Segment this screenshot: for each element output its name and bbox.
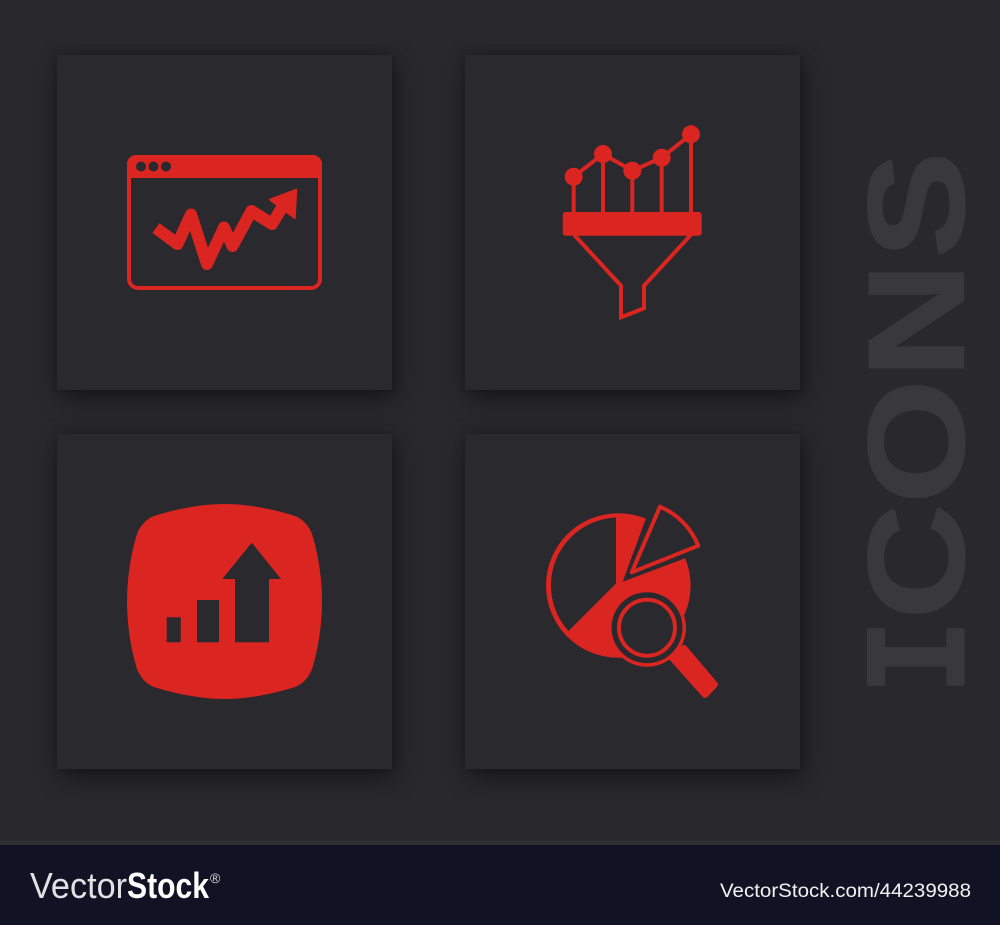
vertical watermark text: ICONS: C bbox=[839, 504, 993, 619]
vertical watermark text: ICONS: O bbox=[839, 379, 993, 504]
icon: funnel with line chart bbox=[563, 125, 702, 317]
icon: rising bars and arrow in squircle bbox=[127, 504, 322, 699]
footer logo: VectorStock: Vector bbox=[30, 865, 127, 906]
panel: bottom-left bbox=[57, 434, 392, 769]
footer logo: VectorStock: Stock bbox=[127, 865, 210, 906]
footer image id: VectorStock.com/44239988 bbox=[720, 881, 971, 902]
vertical watermark text: ICONS bbox=[839, 152, 1000, 694]
footer logo: VectorStock: ® bbox=[210, 870, 221, 886]
panel: bottom-right bbox=[465, 434, 800, 769]
vertical watermark text: ICONS: S bbox=[839, 152, 993, 258]
footer logo: VectorStock bbox=[30, 865, 221, 906]
panel: top-left bbox=[57, 55, 392, 390]
panel: top-right bbox=[465, 55, 800, 390]
strip above footer bbox=[0, 840, 1000, 845]
icon: pie chart with magnifier bbox=[546, 498, 715, 695]
vertical watermark text: ICONS: N bbox=[839, 263, 993, 378]
icon: browser window with rising chart bbox=[127, 155, 322, 288]
footer bar bbox=[0, 845, 1000, 925]
